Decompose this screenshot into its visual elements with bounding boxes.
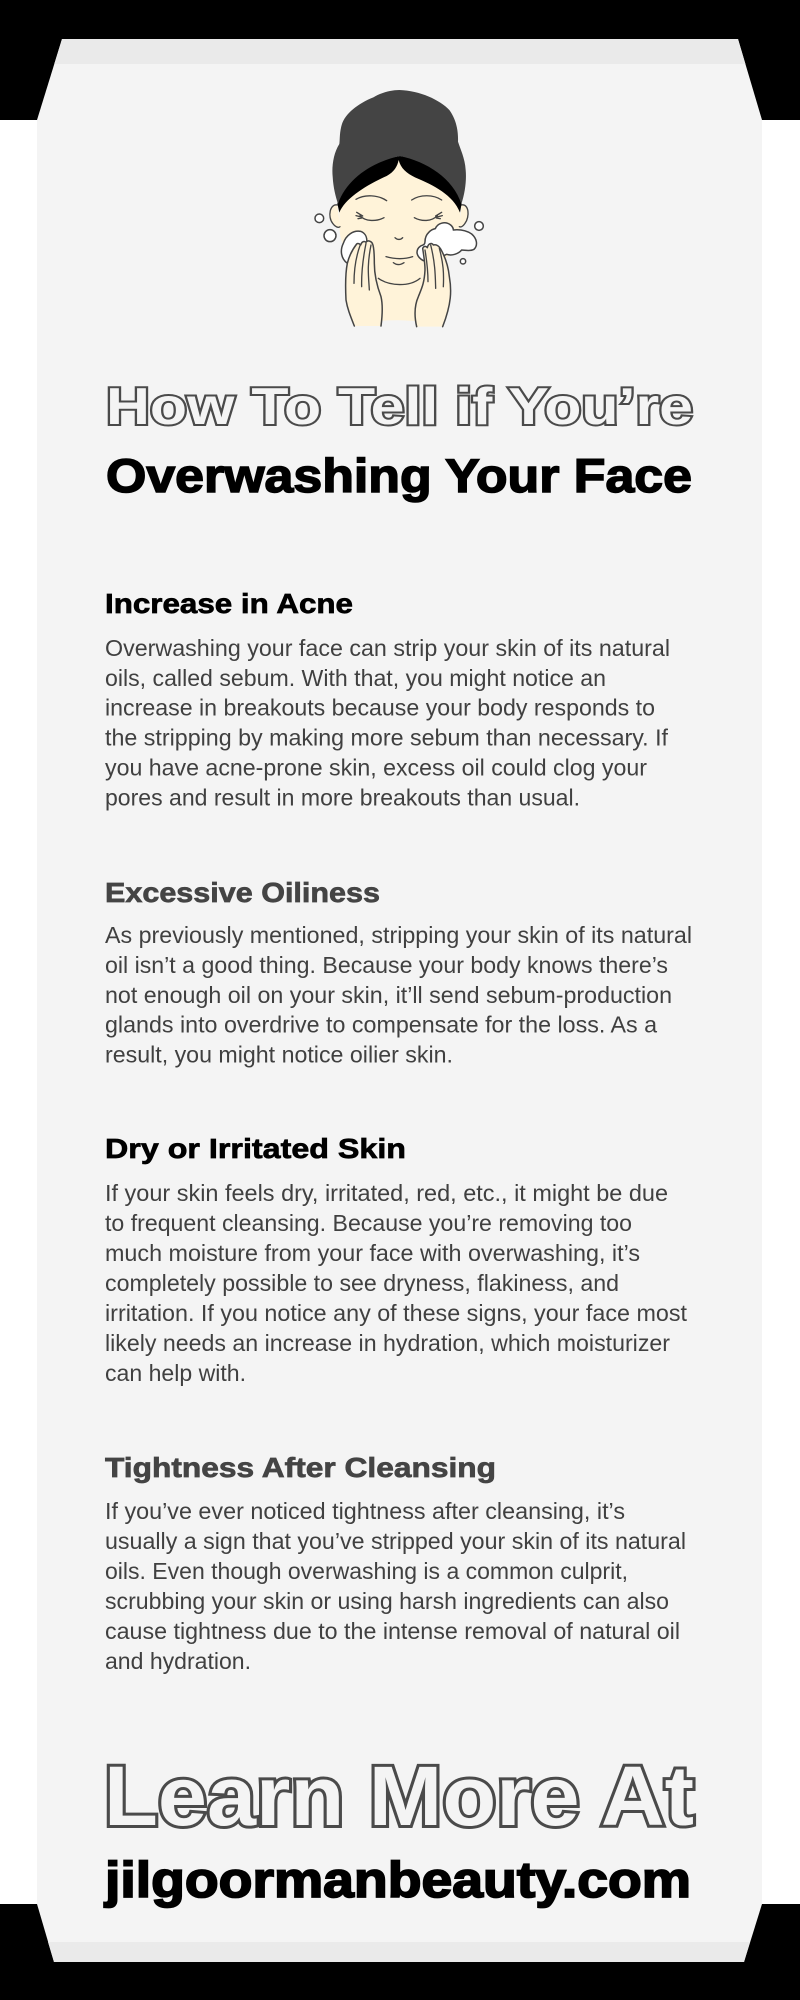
body text	[105, 635, 670, 810]
body text: oils. Even though overwashing is a common culprit,	[105, 1558, 628, 1584]
heading: Tightness After Cleansing	[105, 1452, 496, 1483]
title: Overwashing Your Face: Overwashing Your Face	[106, 449, 692, 502]
body text: If your skin feels dry, irritated, red, etc., it might be due	[105, 1180, 668, 1206]
call to action: Learn More At: Learn More At	[104, 1749, 694, 1843]
body text: oils, called sebum. With that, you might notice an	[105, 665, 606, 691]
body text: likely needs an increase in hydration, which moisturizer	[105, 1330, 670, 1356]
section: Increase in Acne	[105, 588, 670, 810]
body text: oil isn’t a good thing. Because your body knows there’s	[105, 952, 668, 978]
section: Tightness After Cleansing	[105, 1452, 686, 1674]
heading: Increase in Acne	[105, 588, 353, 619]
body text: Overwashing your face can strip your skin of its natural	[105, 635, 670, 661]
body text: irritation. If you notice any of these signs, your face most	[105, 1300, 687, 1326]
call to action: website: jilgoormanbeauty.com	[104, 1852, 691, 1908]
heading: Excessive Oiliness	[105, 877, 380, 908]
body text	[105, 922, 692, 1068]
body text: increase in breakouts because your body responds to	[105, 694, 655, 720]
body text: much moisture from your face with overwashing, it’s	[105, 1240, 640, 1266]
body text: As previously mentioned, stripping your skin of its natural	[105, 922, 692, 948]
body text: to frequent cleansing. Because you’re removing too	[105, 1210, 632, 1236]
heading: Dry or Irritated Skin	[105, 1133, 406, 1164]
title: How To Tell if You're: How To Tell if You’re	[106, 378, 693, 436]
body text: you have acne-prone skin, excess oil could clog your	[105, 754, 647, 780]
body text: not enough oil on your skin, it’ll send sebum-production	[105, 982, 672, 1008]
body text	[105, 1180, 687, 1386]
body text	[105, 1498, 686, 1674]
body text: If you’ve ever noticed tightness after cleansing, it’s	[105, 1498, 625, 1524]
icon: woman washing her face	[315, 90, 483, 327]
body text: glands into overdrive to compensate for the loss. As a	[105, 1012, 658, 1038]
body text: usually a sign that you’ve stripped your skin of its natural	[105, 1528, 686, 1554]
body text: can help with.	[105, 1360, 246, 1386]
section: Dry or Irritated Skin	[105, 1133, 687, 1386]
body text: the stripping by making more sebum than necessary. If	[105, 724, 668, 750]
body text: cause tightness due to the intense removal of natural oil	[105, 1618, 680, 1644]
section: Excessive Oiliness	[105, 877, 692, 1068]
body text: pores and result in more breakouts than usual.	[105, 784, 580, 810]
body text: and hydration.	[105, 1648, 251, 1674]
body text: completely possible to see dryness, flakiness, and	[105, 1270, 619, 1296]
body text: result, you might notice oilier skin.	[105, 1042, 453, 1068]
body text: scrubbing your skin or using harsh ingredients can also	[105, 1588, 669, 1614]
